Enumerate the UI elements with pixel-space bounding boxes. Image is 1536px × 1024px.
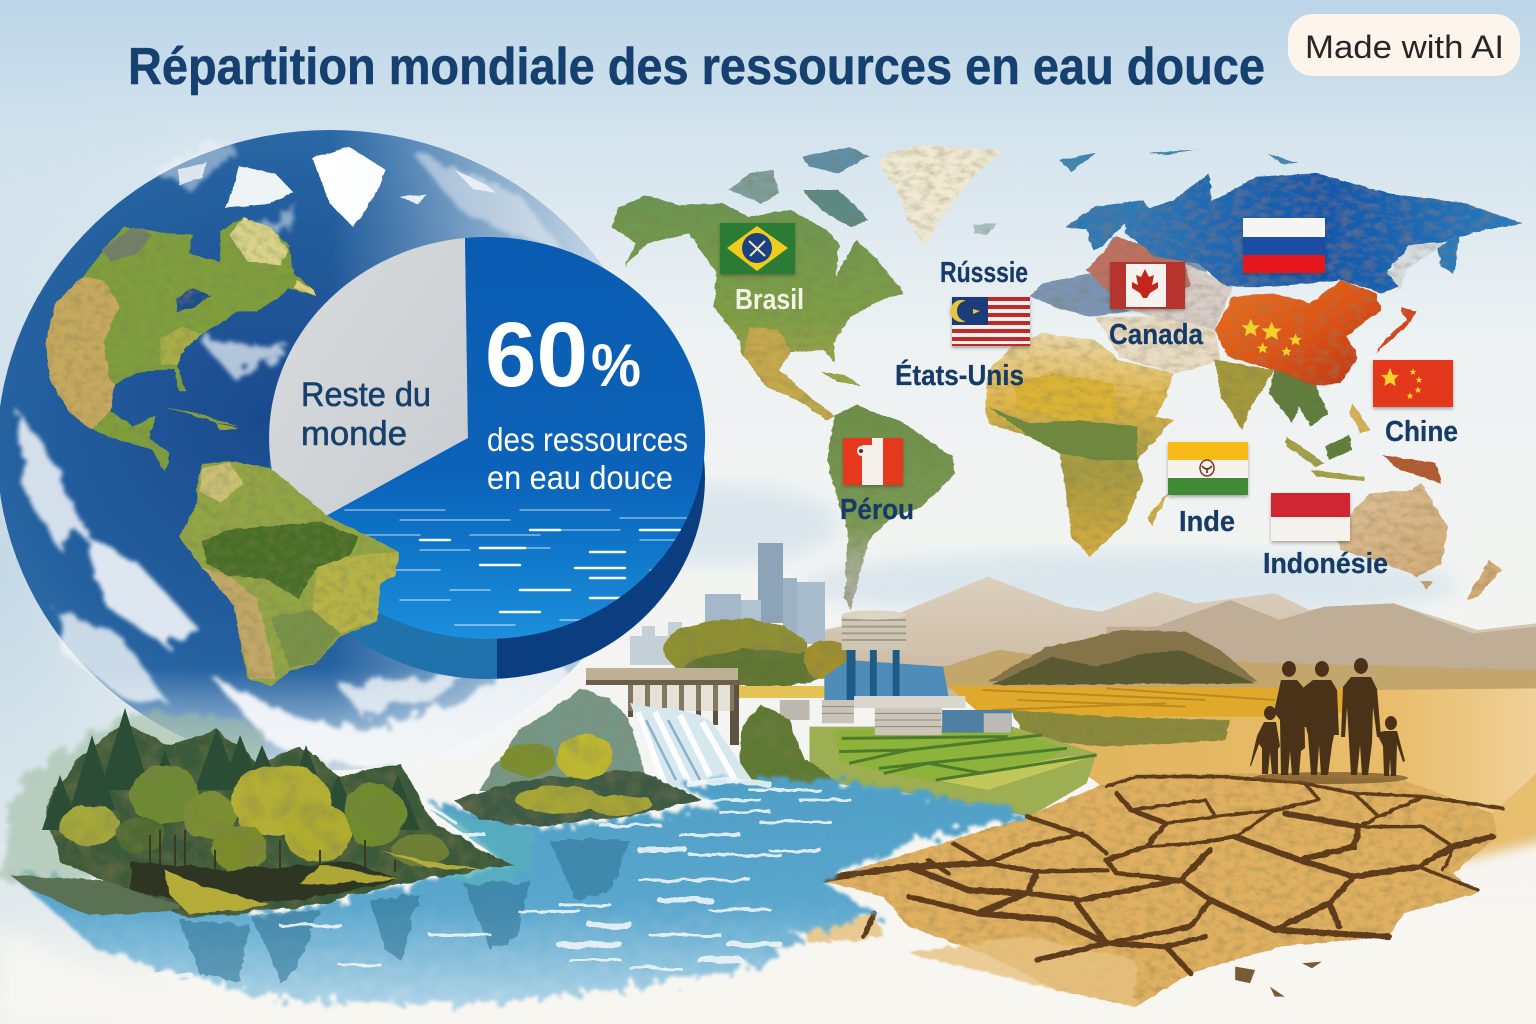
forest reflections <box>180 840 630 985</box>
treatment tanks <box>780 696 1011 735</box>
tree trunks <box>150 830 395 885</box>
hazy background trees <box>0 715 265 890</box>
map: South-East Asia <box>1269 370 1328 427</box>
trees behind dam <box>663 619 852 686</box>
map: Scandinavia <box>1066 200 1155 250</box>
globe with pie chart <box>0 130 705 770</box>
map: Greenland <box>878 145 1003 247</box>
silhouette: child right <box>1377 716 1405 776</box>
flag: Indonésie <box>1271 493 1350 541</box>
map: South America <box>827 405 955 610</box>
map: Africa <box>985 333 1173 557</box>
yellow strip beside dam <box>738 686 838 698</box>
title: Répartition mondiale des ressources en eau douce <box>128 38 1265 96</box>
pie water reflections <box>345 510 690 625</box>
waterfall <box>630 703 752 790</box>
map: North America <box>612 195 904 420</box>
small island with trees <box>455 735 702 825</box>
map: Middle East <box>1096 317 1221 373</box>
map: New Zealand <box>1466 560 1501 600</box>
earth fragments <box>1235 962 1322 997</box>
blue building <box>824 660 949 700</box>
dry plain <box>1067 688 1536 813</box>
North America on globe <box>46 218 317 472</box>
olive hedge <box>1010 710 1230 747</box>
map label: Inde: Inde <box>1179 506 1235 538</box>
flag: Chine <box>1373 360 1453 407</box>
mountains <box>824 577 1536 700</box>
badge: made with AI: Made with AI <box>1305 29 1504 65</box>
map: Central Africa <box>988 407 1137 460</box>
map label: Pérou: Pérou <box>840 494 914 526</box>
map: Madagascar <box>1148 493 1168 527</box>
water highlights <box>150 781 850 975</box>
pie caption: en eau douce <box>487 459 673 496</box>
silhouette: adult centre <box>1301 661 1339 775</box>
map: Australia <box>1334 483 1448 577</box>
map: Indonesian islands <box>1287 403 1370 482</box>
map: China <box>1215 280 1382 387</box>
map: Iceland <box>973 223 997 235</box>
fade of globe's lower edge <box>0 130 663 770</box>
tower legs <box>847 650 900 700</box>
map label: États-Unis: États-Unis <box>895 358 1024 392</box>
scene: mountains, fields and drought land <box>800 577 1536 1007</box>
paper fade around lower left <box>0 930 280 1024</box>
map: Arctic islands <box>728 147 869 227</box>
fade of globe's right side <box>0 130 663 770</box>
flag: Pérou <box>843 438 903 485</box>
pie chart <box>269 237 705 679</box>
hillside below dam <box>480 690 650 790</box>
map: India <box>1215 360 1275 430</box>
world map <box>612 145 1522 610</box>
skyline <box>630 543 825 665</box>
irrigated plots <box>834 730 1097 790</box>
turquoise shallows <box>420 810 535 890</box>
map: stars on China <box>1242 319 1302 356</box>
dam <box>586 668 740 745</box>
South America on globe <box>179 461 399 686</box>
map label: Indonésie: Indonésie <box>1263 548 1388 580</box>
map: Japan <box>1376 307 1417 353</box>
pie sector: 60% <box>295 237 705 639</box>
pie sector: rest of world <box>269 238 468 533</box>
map label: Canada: Canada <box>1109 319 1204 351</box>
pie label: reste du monde: Reste du <box>301 376 431 414</box>
golden rice field <box>948 686 1379 717</box>
globe sphere <box>0 130 663 770</box>
sunlit ground <box>10 850 485 915</box>
silhouette: tall adult <box>1341 658 1381 775</box>
map label: Brasil: Brasil <box>735 284 804 316</box>
green grass bank <box>810 727 1097 817</box>
map: New Guinea <box>1382 455 1442 483</box>
map: Kamchatka <box>1436 237 1460 273</box>
soft sand behind drought land <box>1304 693 1536 860</box>
conifers <box>42 708 420 830</box>
yellow-green tree canopies <box>60 765 448 872</box>
water tower factory <box>780 610 1011 735</box>
map label: Chine: Chine <box>1385 416 1458 448</box>
map: Tasmania <box>1421 582 1433 589</box>
pie side wall: rest of world <box>269 400 497 679</box>
map: Sakhalin <box>1388 242 1448 290</box>
flag: Inde <box>1168 442 1248 495</box>
flag: Russie <box>1243 218 1325 273</box>
map: Mexico and western desert <box>743 327 806 400</box>
forest mass <box>45 725 515 918</box>
map: Central Asia <box>1113 263 1233 330</box>
pie stat: percent sign: % <box>591 332 641 399</box>
pie label: reste du monde: monde <box>301 415 407 453</box>
bushes by waterfall <box>738 705 840 790</box>
silhouette: adult with cap <box>1274 661 1305 775</box>
tower tank <box>842 610 906 650</box>
river <box>10 778 1027 1005</box>
flag: Canada <box>1110 262 1185 309</box>
tree line <box>933 630 1536 693</box>
near mountains <box>1106 600 1536 687</box>
map: Central Europe <box>1087 237 1191 297</box>
flag: États-Unis <box>950 297 1030 346</box>
map label: Rússie: Rússsie <box>940 257 1028 289</box>
shadow under family <box>1252 772 1408 784</box>
family silhouettes <box>1250 658 1408 784</box>
clouds <box>18 140 575 770</box>
map: Sahel <box>1012 373 1119 423</box>
pie caption: des ressources <box>487 421 688 458</box>
map: Russia <box>1125 173 1522 293</box>
map: Russian Arctic islands <box>1060 149 1298 172</box>
silhouette: child left <box>1250 706 1280 774</box>
forest island <box>0 708 515 918</box>
polar ice <box>179 147 496 227</box>
pie stat: 60: 60 <box>485 304 588 406</box>
map: Europe <box>1030 237 1209 317</box>
badge: made with AI <box>1288 14 1520 76</box>
cracked earth <box>800 773 1502 1007</box>
map: Central America islands <box>821 372 863 387</box>
flag: Brasil <box>720 223 795 274</box>
pie side wall: 60% <box>497 458 705 679</box>
